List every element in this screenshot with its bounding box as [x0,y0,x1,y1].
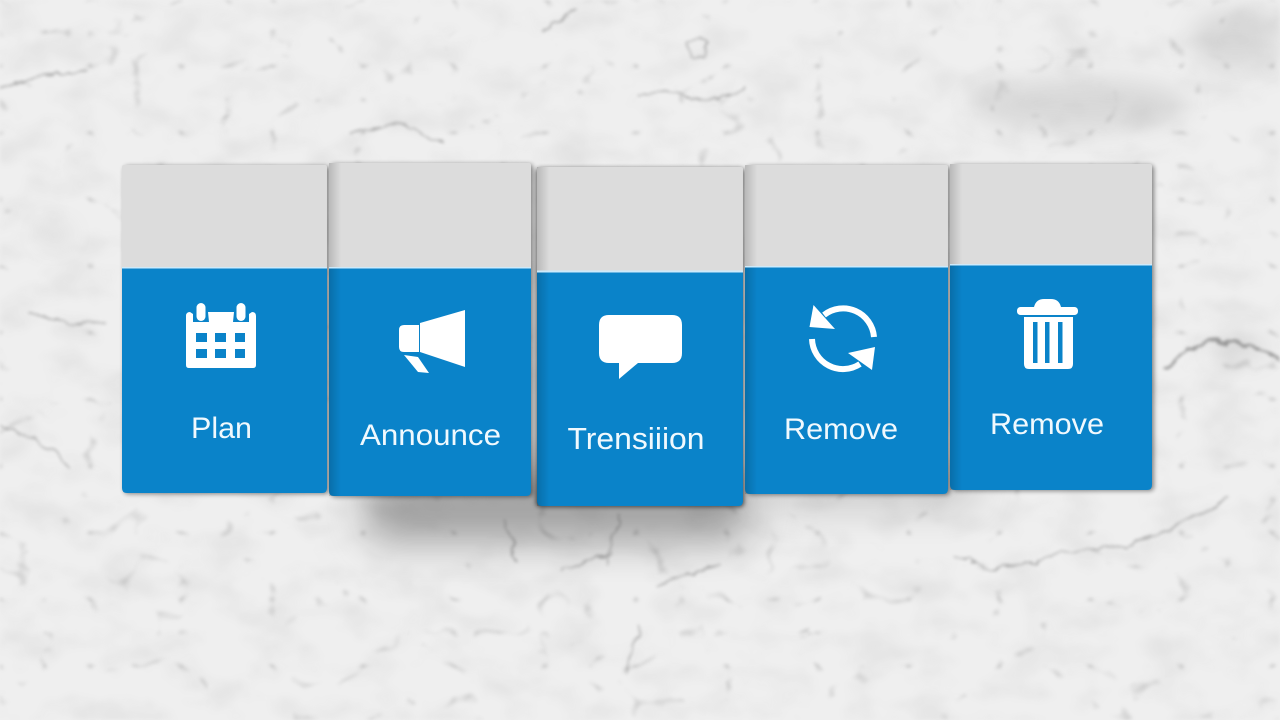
label: Announce: Announce [360,419,501,452]
card: Transition [536,167,744,507]
icon: calendar [186,303,256,368]
card: Remove (trash) [950,164,1154,491]
card row [122,163,1154,507]
card: Remove (sync) [745,165,950,495]
card: Announce [329,163,533,497]
cast shadow under cards [365,470,980,542]
icon: speech bubble [599,315,682,379]
icon: megaphone [399,310,465,373]
card: Plan [122,165,329,494]
icon: sync arrows [810,305,875,370]
label: Trensiiion: Trensiiion [568,421,704,456]
icon: trash can [1017,299,1078,369]
label: Remove: Remove [990,408,1104,441]
label: Remove: Remove [784,413,898,446]
label: Plan: Plan [191,412,252,445]
